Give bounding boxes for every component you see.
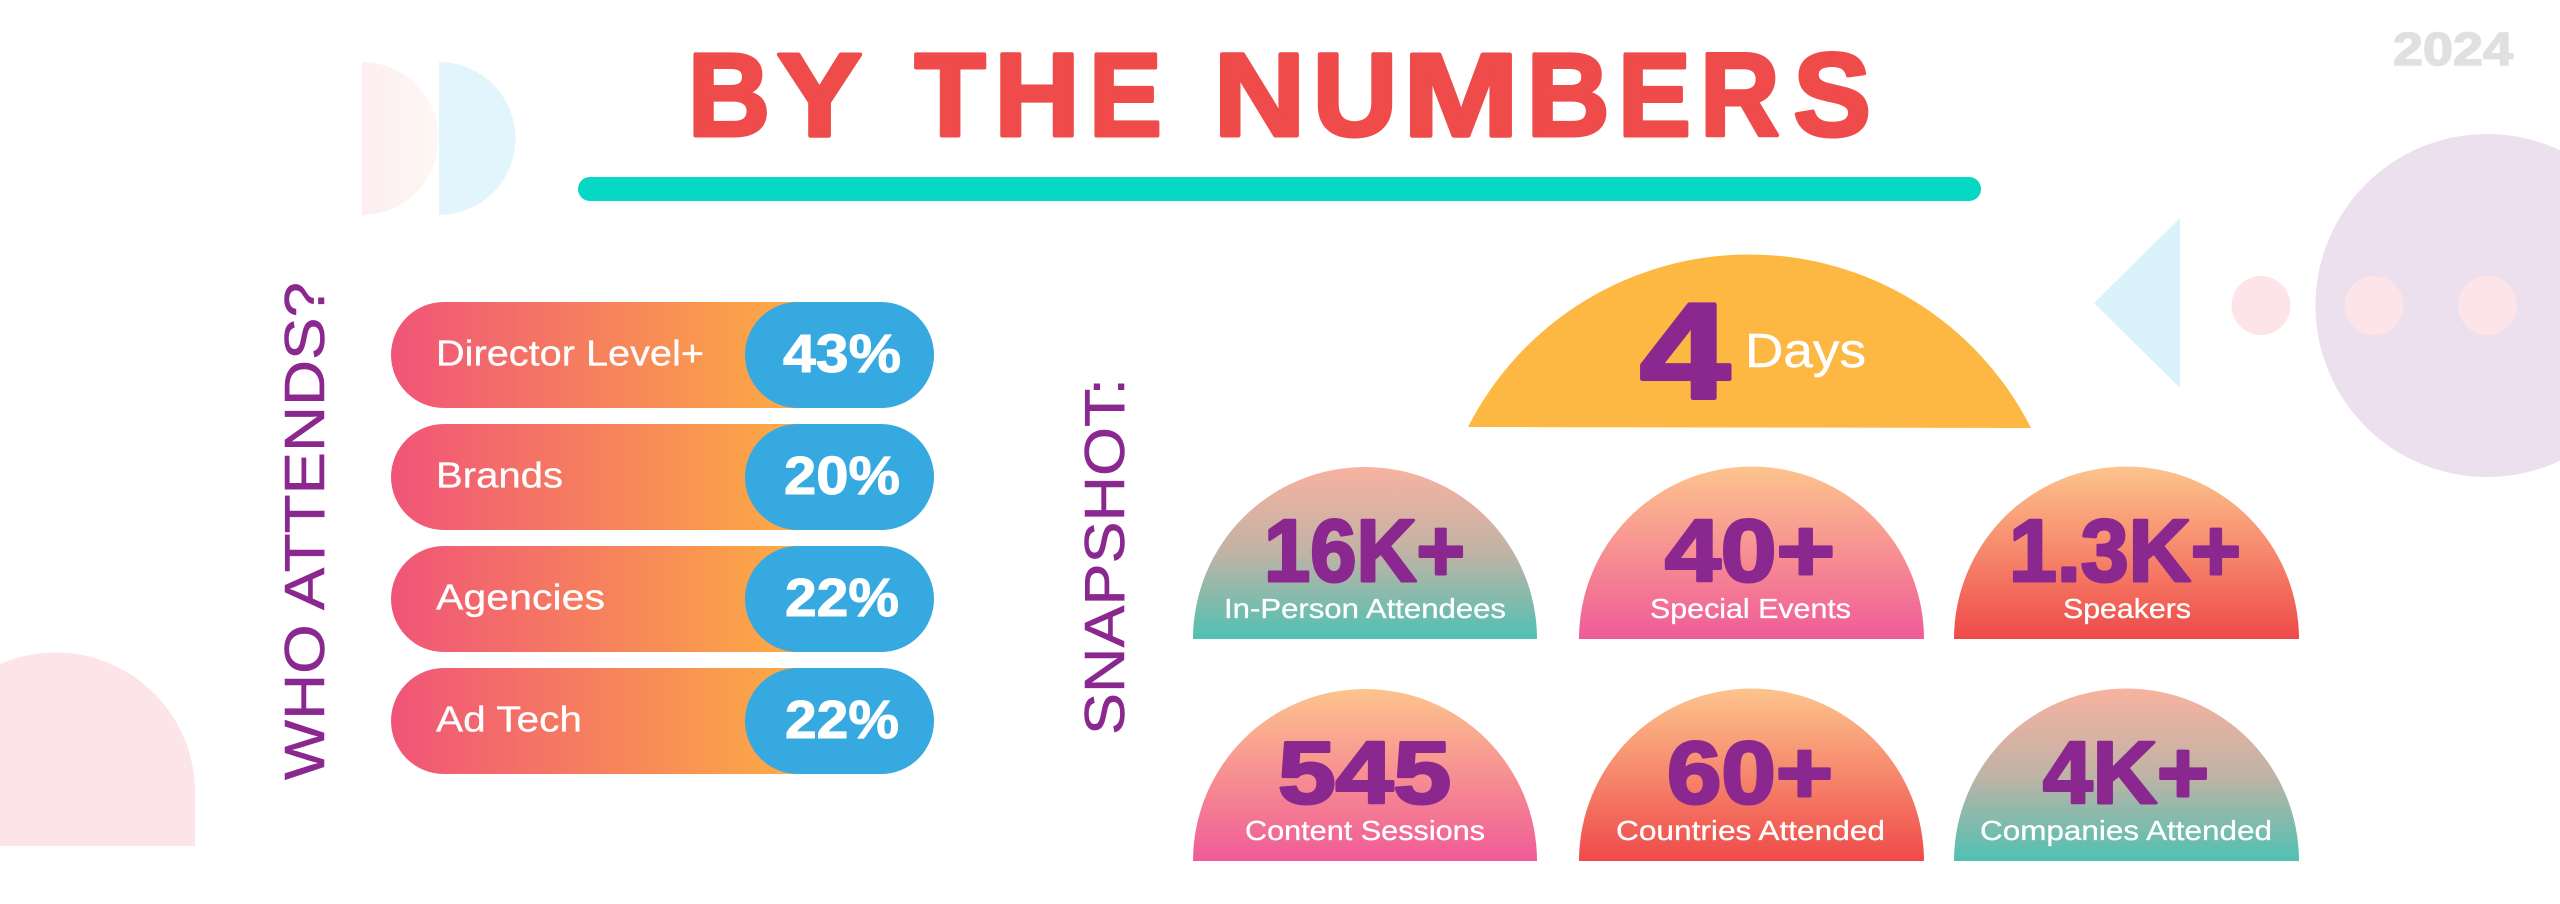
stat: countries attended: Countries Attended xyxy=(1616,815,1885,846)
bar: ad tech: 22% xyxy=(785,690,899,750)
stat: companies attended: 4K+ xyxy=(2043,723,2209,822)
stat: content sessions: Content Sessions xyxy=(1245,815,1485,846)
title underline bar xyxy=(578,177,1981,201)
stat: countries attended: 60+ xyxy=(1667,723,1833,822)
title: R xyxy=(1700,30,1780,162)
decorative triangle xyxy=(2094,218,2180,388)
bar: director level: Director Level+ xyxy=(436,332,704,374)
title: B xyxy=(688,30,770,162)
panel: who attends bars xyxy=(391,302,934,774)
title: H xyxy=(994,30,1080,162)
decorative arch bottom left xyxy=(0,652,195,846)
stat: 4 days arch xyxy=(1468,254,2031,428)
stat: special events: 40+ xyxy=(1665,501,1835,600)
stat: special events: Special Events xyxy=(1650,593,1851,624)
stat: content sessions xyxy=(1193,689,1537,861)
decorative pink dots xyxy=(2232,276,2517,335)
bar: ad tech xyxy=(391,668,934,774)
heading: snapshot: SNAPSHOT: xyxy=(1073,378,1137,735)
stat: speakers: Speakers xyxy=(2063,593,2191,624)
stat: 4 days arch: 4 xyxy=(1640,275,1730,427)
bar: brands: Brands xyxy=(436,454,563,496)
bar: director level: 43% xyxy=(783,324,901,384)
stat: speakers: 1.3K+ xyxy=(2009,501,2241,600)
bar: agencies: 22% xyxy=(785,568,899,628)
bar: agencies xyxy=(391,546,934,652)
stat: speakers xyxy=(1954,466,2299,639)
stat: in-person attendees: In-Person Attendees xyxy=(1224,593,1506,624)
stat: in-person attendees: 16K+ xyxy=(1264,501,1465,600)
bar: ad tech: Ad Tech xyxy=(436,698,582,740)
title: E xyxy=(1618,30,1691,162)
title: S xyxy=(1793,30,1871,162)
stat: countries attended xyxy=(1579,688,1924,861)
title: Y xyxy=(777,30,860,162)
bar: director level xyxy=(391,302,934,408)
bar: brands: 20% xyxy=(784,446,900,506)
decorative half circles top left xyxy=(362,62,516,215)
title: B xyxy=(1527,30,1610,162)
stat: companies attended: Companies Attended xyxy=(1980,815,2272,846)
bar: brands xyxy=(391,424,934,530)
stat: special events xyxy=(1579,466,1924,639)
title: M xyxy=(1403,30,1519,162)
title: E xyxy=(1089,30,1162,162)
title: N xyxy=(1214,30,1305,162)
heading: who attends: WHO ATTENDS? xyxy=(273,282,337,780)
stat: in-person attendees xyxy=(1193,467,1537,639)
title: U xyxy=(1313,30,1397,162)
stat: content sessions: 545 xyxy=(1278,723,1451,822)
year label: 2024 xyxy=(2393,23,2513,75)
bar: agencies: Agencies xyxy=(436,576,605,618)
decorative large circle xyxy=(2316,134,2560,477)
title: T xyxy=(915,30,986,162)
stat: companies attended xyxy=(1954,688,2299,861)
stat: 4 days arch: Days xyxy=(1745,325,1866,378)
